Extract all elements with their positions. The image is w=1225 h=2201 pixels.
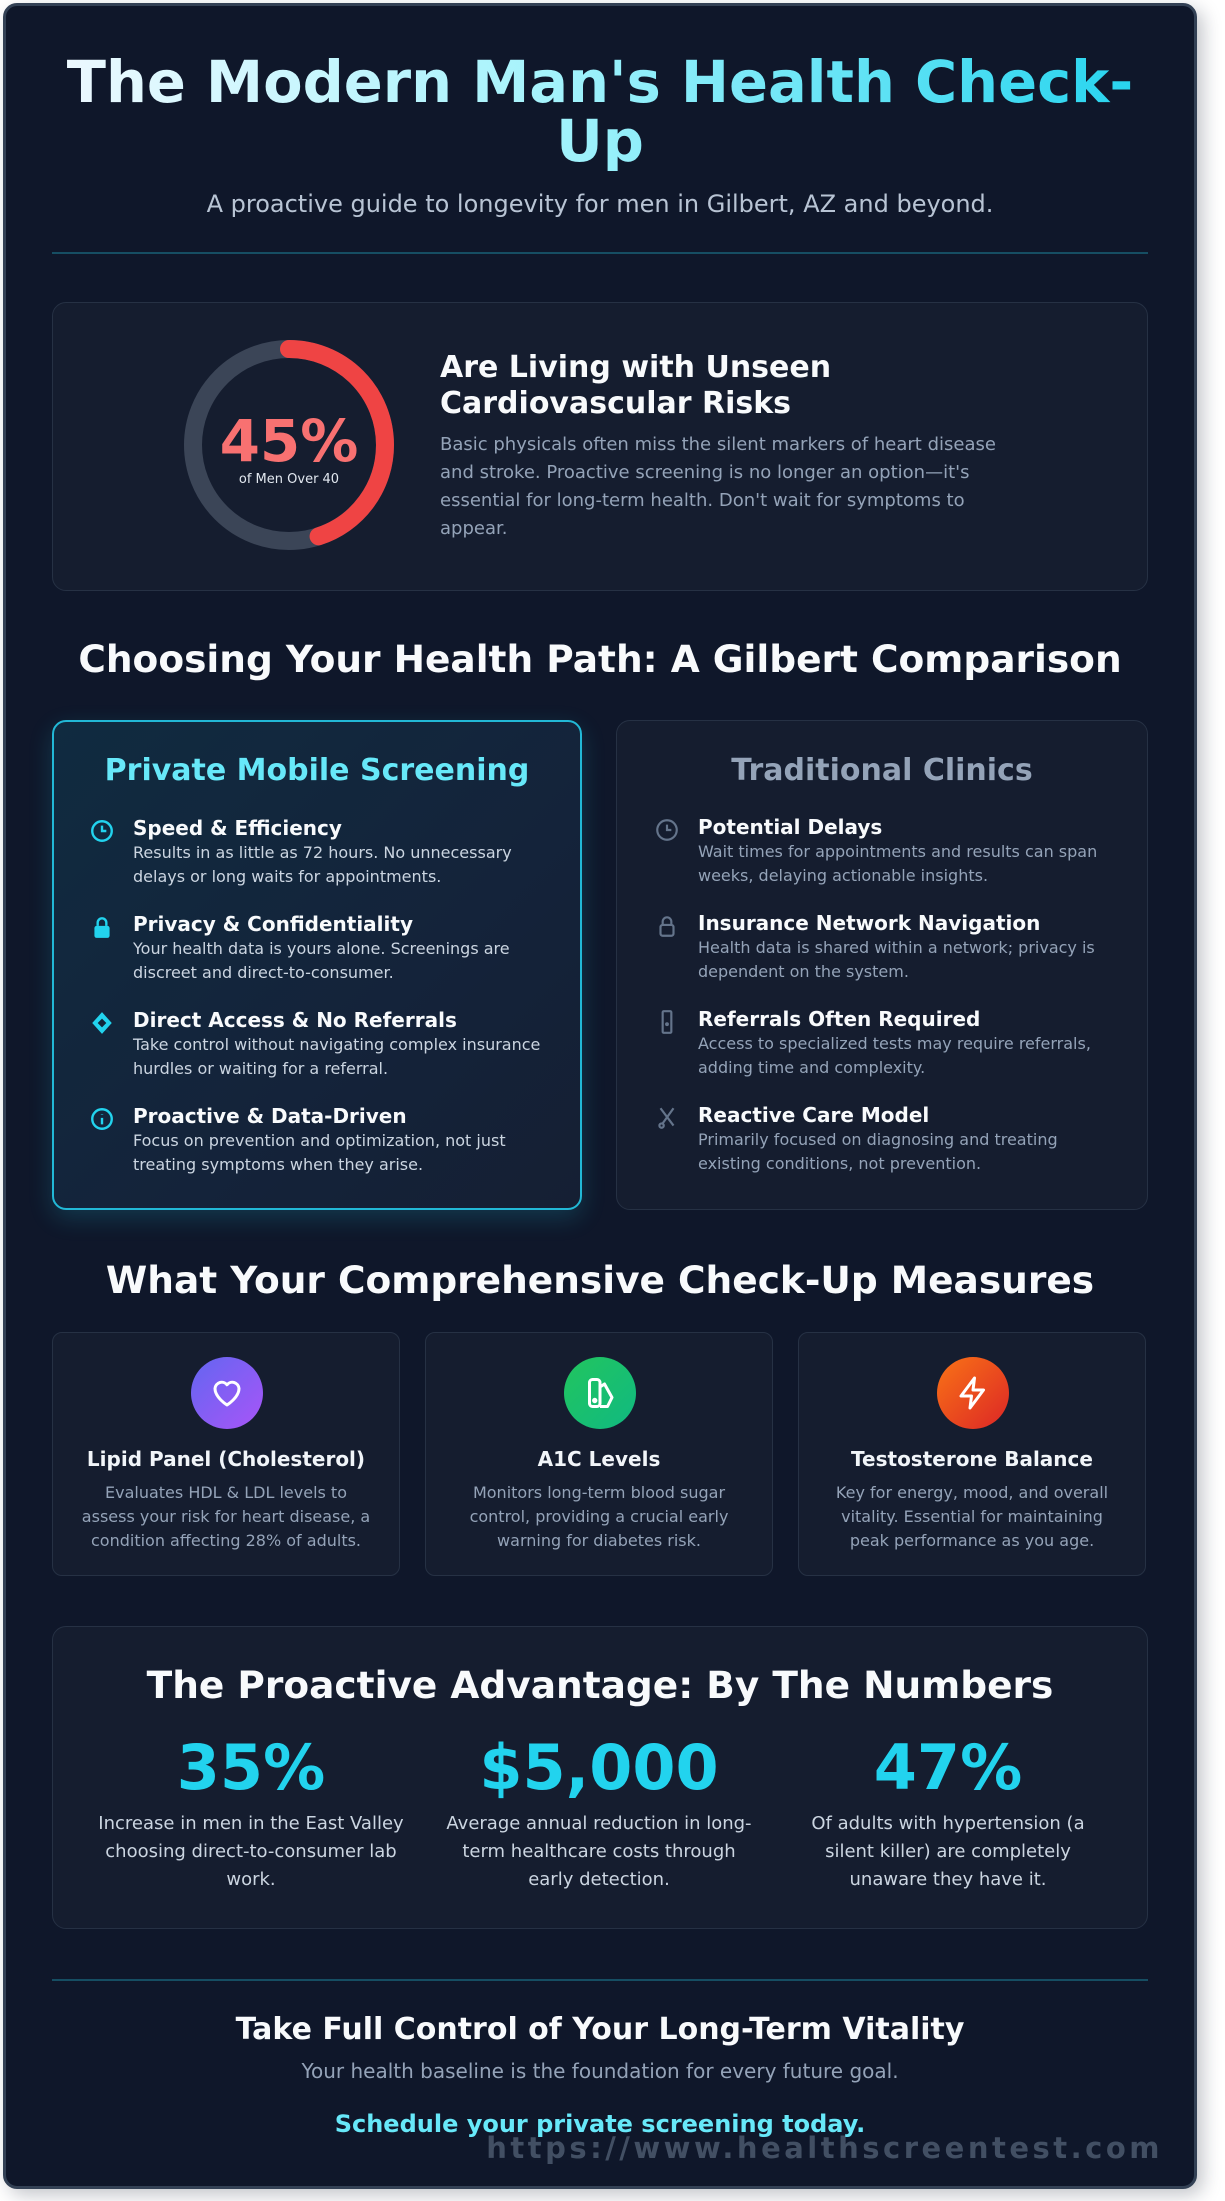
title: The Modern Man's Health Check- [67, 49, 1133, 116]
item: reactive: existing conditions, not prevention. [698, 1154, 981, 1173]
item: proactive: Focus on prevention and optimization, not just [133, 1131, 506, 1150]
item: referrals [662, 1007, 1091, 1077]
stat: 35%: Increase in men in the East Valley choosing direct-to-consumer lab work. [98, 1813, 404, 1890]
item: direct access: Direct Access & No Referrals [133, 1008, 457, 1032]
icon: blood sugar [564, 1357, 636, 1429]
item: insurance: Health data is shared within a network; privacy is [698, 938, 1095, 957]
item: direct access [92, 1008, 540, 1078]
paragraph: Basic physicals often miss the silent markers of heart disease and stroke. Proactive screening is no longer an option—it's essential for long-term health. Don't wait for symptoms to appear. [440, 434, 996, 539]
watermark url: https://www.healthscreentest.com [486, 2131, 1163, 2165]
title: Up [556, 108, 644, 175]
stat: $5,000 [446, 1731, 752, 1890]
title [40, 53, 1160, 171]
subtitle: A proactive guide to longevity for men in Gilbert, AZ and beyond. [207, 190, 993, 218]
heading: Are Living with Unseen [440, 350, 831, 385]
item: delays: weeks, delaying actionable insights. [698, 866, 988, 885]
numbers heading: The Proactive Advantage: By The Numbers [147, 1663, 1053, 1707]
stat: 47%: 47% [874, 1731, 1022, 1804]
item: delays: Wait times for appointments and results can span [698, 842, 1097, 861]
stat: 47% [811, 1731, 1085, 1890]
card: A1C [425, 1332, 773, 1576]
footer subtext: Your health baseline is the foundation for every future goal. [301, 2059, 899, 2083]
item: proactive: treating symptoms when they arise. [133, 1155, 423, 1174]
stat: 35%: 35% [177, 1731, 325, 1804]
card: lipid panel: Evaluates HDL & LDL levels to assess your risk for heart disease, a condition affecting 28% of adults. [82, 1483, 370, 1550]
icon: lightning [937, 1357, 1009, 1429]
item: delays: Potential Delays [698, 815, 882, 839]
card: A1C: Monitors long-term blood sugar control, providing a crucial early warning for diabetes risk. [470, 1483, 728, 1550]
footer heading: Take Full Control of Your Long-Term Vitality [236, 2012, 964, 2047]
item: speed: delays or long waits for appointments. [133, 867, 441, 886]
item: privacy [94, 912, 510, 982]
item: insurance [659, 911, 1095, 981]
item: speed: Results in as little as 72 hours. No unnecessary [133, 843, 512, 862]
heading: Private Mobile Screening [105, 753, 529, 788]
item: privacy: discreet and direct-to-consumer. [133, 963, 394, 982]
panel: traditional clinics [616, 720, 1148, 1210]
stat: $5,000: Average annual reduction in long-term healthcare costs through early detection. [446, 1813, 752, 1890]
item: proactive: Proactive & Data-Driven [133, 1104, 407, 1128]
heading: Cardiovascular Risks [440, 386, 791, 421]
donut chart 45%: of Men Over 40 [239, 472, 339, 487]
item: speed: Speed & Efficiency [133, 816, 342, 840]
call to action: Schedule your private screening today. [335, 2110, 865, 2138]
card: lipid panel [52, 1332, 400, 1576]
donut chart 45%: 45% [220, 407, 358, 475]
item: privacy: Privacy & Confidentiality [133, 912, 413, 936]
card: A1C: A1C Levels [538, 1447, 660, 1471]
card: lipid panel: Lipid Panel (Cholesterol) [87, 1447, 365, 1471]
panel: by the numbers [52, 1626, 1148, 1929]
card: testosterone [798, 1332, 1146, 1576]
card: testosterone: Key for energy, mood, and overall vitality. Essential for maintaining peak performance as you age. [836, 1483, 1108, 1550]
item: direct access: Take control without navigating complex insurance [133, 1035, 540, 1054]
item: reactive [658, 1103, 1058, 1173]
panel: private mobile screening [52, 720, 582, 1210]
panel: cardiovascular risk stat [52, 302, 1148, 591]
item: referrals: Access to specialized tests may require referrals, [698, 1034, 1091, 1053]
item: proactive [91, 1104, 506, 1174]
item: reactive: Primarily focused on diagnosing and treating [698, 1130, 1058, 1149]
section heading: comparison: Choosing Your Health Path: A Gilbert Comparison [78, 637, 1122, 681]
donut chart 45% [184, 340, 394, 550]
stat: 47%: Of adults with hypertension (a silent killer) are completely unaware they have it. [811, 1813, 1085, 1890]
card: testosterone: Testosterone Balance [851, 1447, 1093, 1471]
item: speed [91, 816, 512, 886]
item: direct access: hurdles or waiting for a referral. [133, 1059, 388, 1078]
item: privacy: Your health data is yours alone. Screenings are [133, 939, 510, 958]
heading [440, 350, 831, 421]
item: insurance: dependent on the system. [698, 962, 909, 981]
stat: $5,000: $5,000 [479, 1731, 719, 1804]
icon: heart [191, 1357, 263, 1429]
item: referrals: adding time and complexity. [698, 1058, 925, 1077]
item: referrals: Referrals Often Required [698, 1007, 980, 1031]
item: delays [656, 815, 1097, 885]
item: reactive: Reactive Care Model [698, 1103, 929, 1127]
heading: Traditional Clinics [731, 753, 1033, 788]
section heading: measures: What Your Comprehensive Check-Up Measures [106, 1258, 1094, 1302]
stat: 35% [98, 1731, 404, 1890]
item: insurance: Insurance Network Navigation [698, 911, 1040, 935]
